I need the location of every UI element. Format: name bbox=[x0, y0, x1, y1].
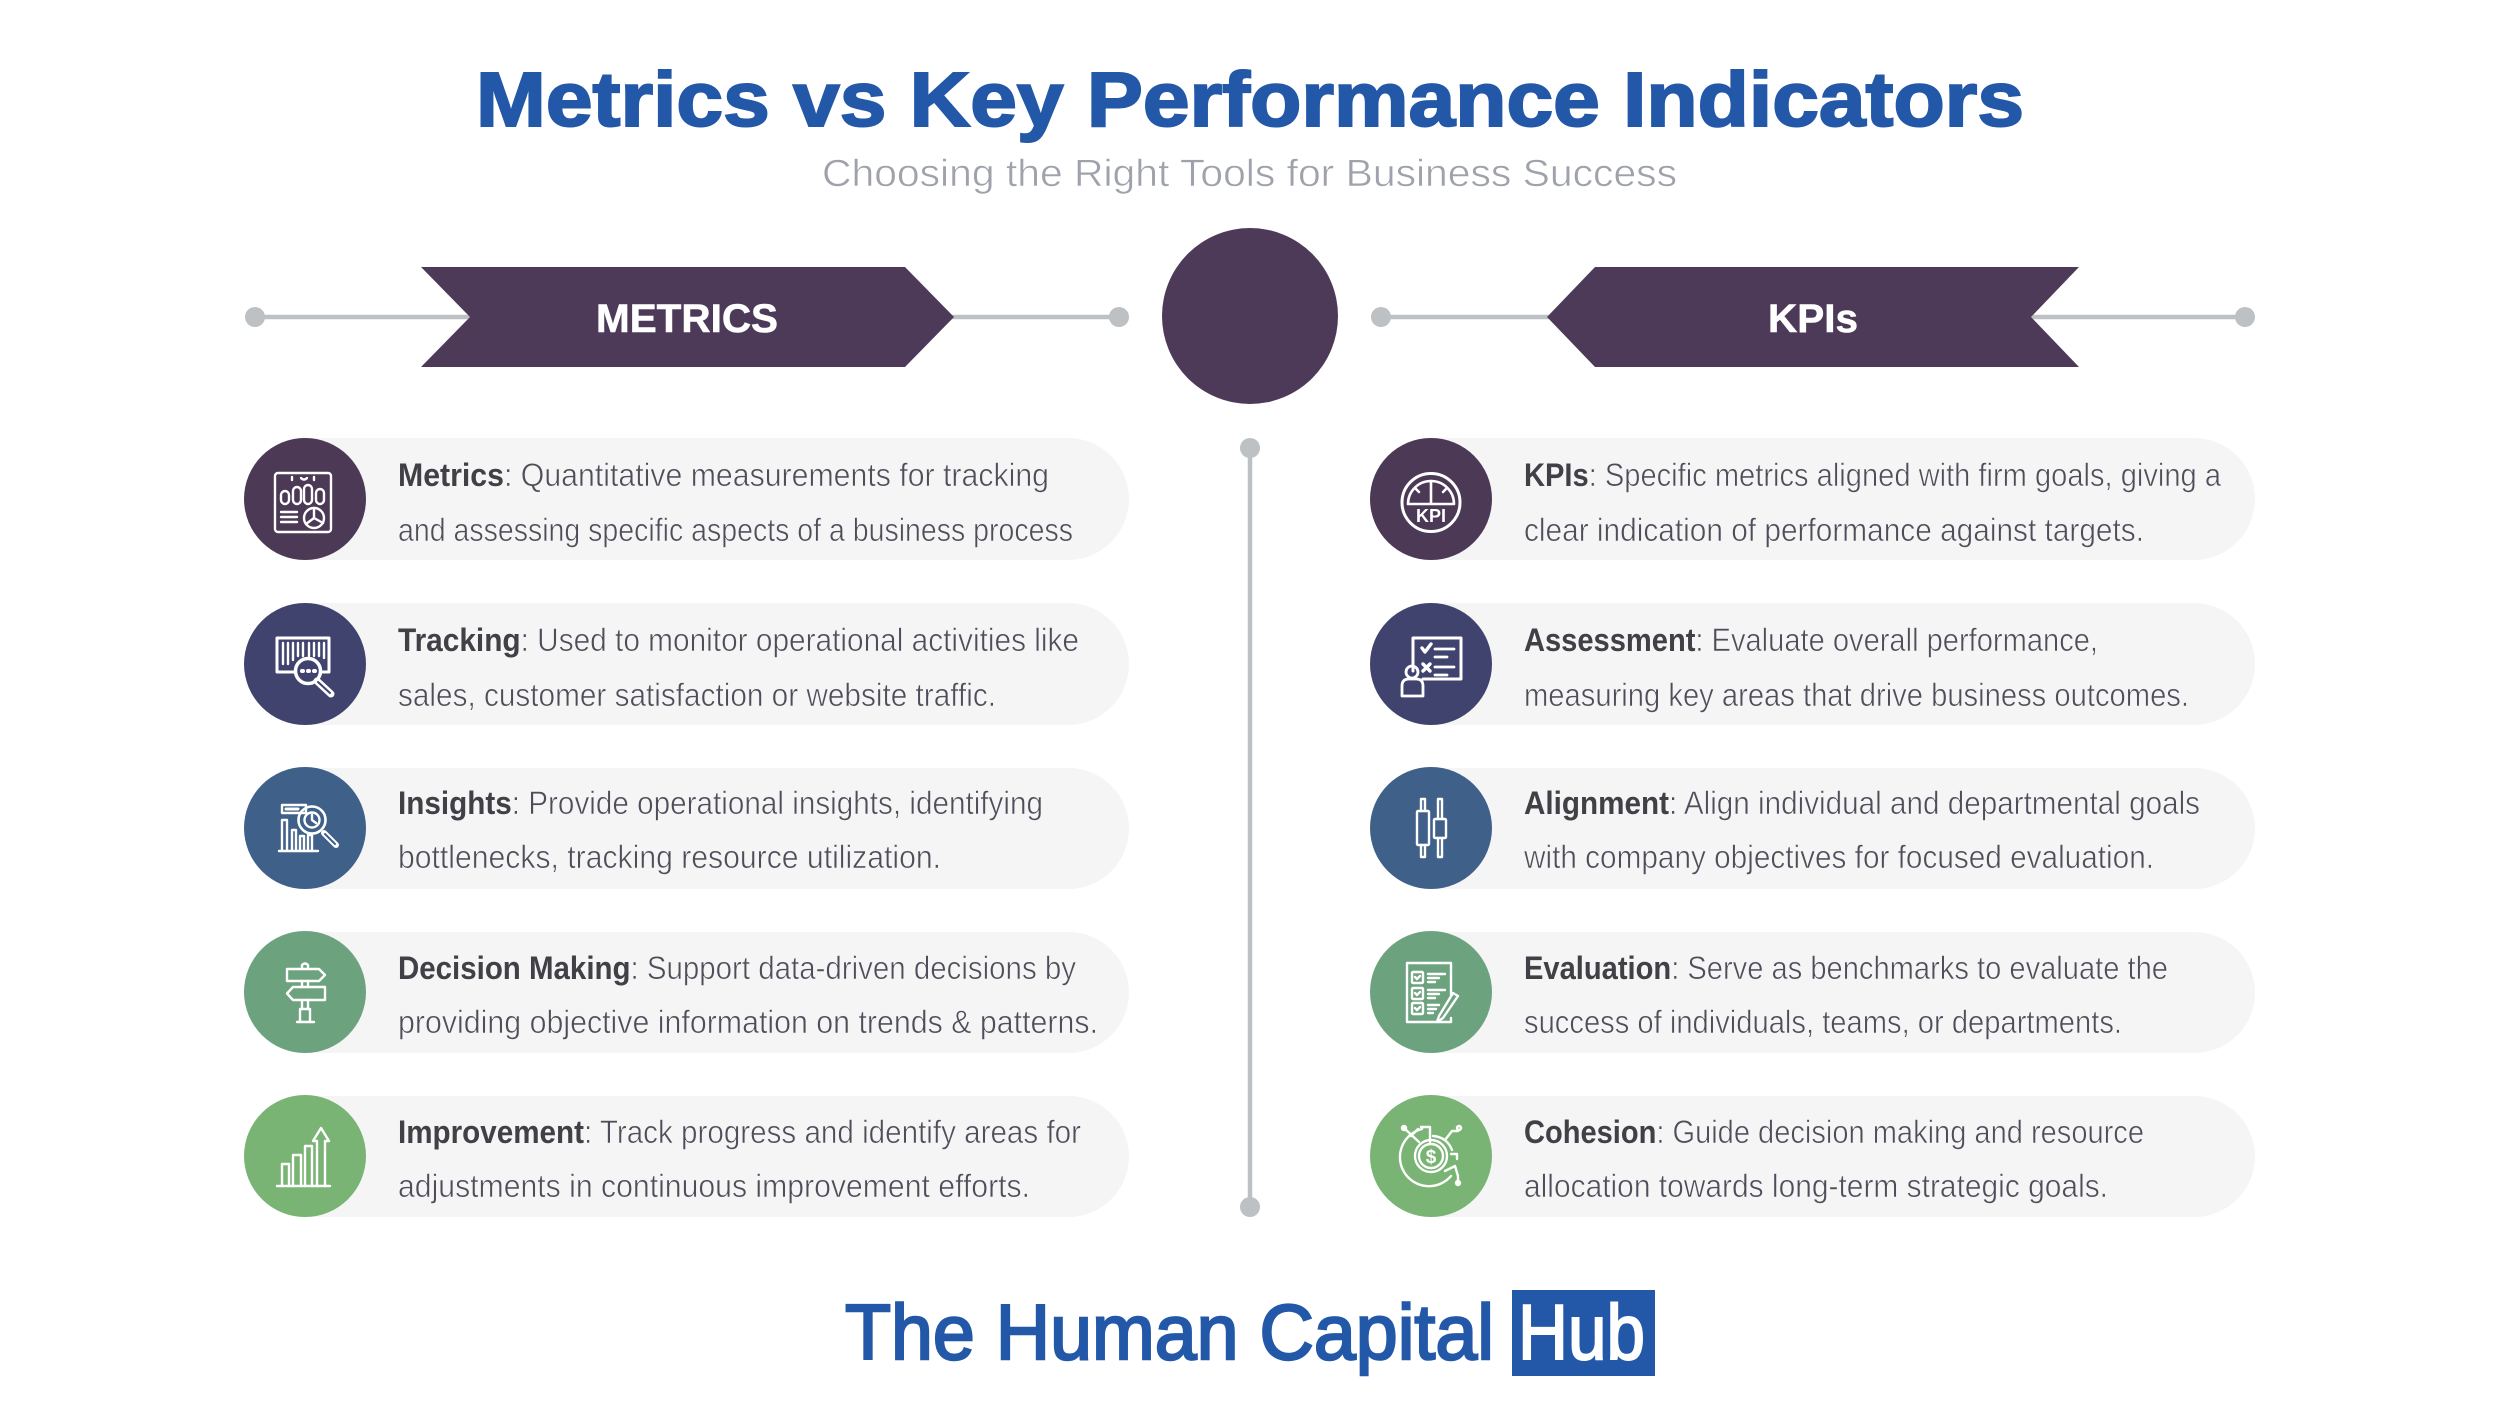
icon: assessment board bbox=[1402, 638, 1461, 696]
text: Assessment: Assessment: Evaluate overall performance, bbox=[1524, 622, 2098, 658]
row: Insights: bottlenecks, tracking resource utilization. bbox=[398, 839, 941, 875]
icon: growth bars bbox=[277, 1128, 330, 1186]
text: Evaluation: Evaluation: Serve as benchmarks to evaluate the bbox=[1524, 950, 2168, 986]
row: Improvement: adjustments in continuous improvement efforts. bbox=[398, 1168, 1030, 1204]
logo: The Human Capital Hub: Hub bbox=[1518, 1288, 1645, 1376]
row: Improvement bbox=[244, 1095, 1129, 1217]
text: Cohesion: Cohesion: Guide decision making and resource bbox=[1524, 1114, 2144, 1150]
icon: kpi gauge bbox=[1402, 474, 1460, 532]
icon: kpi gauge: KPI bbox=[1416, 506, 1446, 526]
icon: candlesticks bbox=[1417, 799, 1446, 857]
row: Metrics: and assessing specific aspects of a business process bbox=[398, 512, 1073, 548]
icon: chart magnifier bbox=[279, 805, 336, 851]
row: Decision Making bbox=[244, 931, 1129, 1053]
row: Alignment bbox=[1370, 767, 2255, 889]
panel: kpis column bbox=[1370, 438, 2255, 1217]
row: Insights bbox=[244, 767, 1129, 889]
icon: barcode magnifier bbox=[277, 638, 331, 694]
center circle bbox=[1162, 228, 1338, 404]
icon: dashboard bbox=[275, 473, 331, 532]
row: Cohesion: allocation towards long-term strategic goals. bbox=[1524, 1168, 2108, 1204]
subtitle: Choosing the Right Tools for Business Success bbox=[822, 153, 1677, 195]
center divider line bbox=[1240, 438, 1260, 1217]
row: Decision Making: providing objective information on trends & patterns. bbox=[398, 1004, 1098, 1040]
panel: metrics column bbox=[244, 438, 1129, 1217]
icon: checklist bbox=[1407, 963, 1458, 1022]
icon: money target bbox=[1400, 1126, 1461, 1186]
row: Assessment bbox=[1370, 603, 2255, 725]
text: Decision Making: Decision Making: Support data-driven decisions by bbox=[398, 950, 1076, 986]
row: KPIs: clear indication of performance against targets. bbox=[1524, 512, 2144, 548]
title: Metrics vs Key Performance Indicators bbox=[476, 57, 2024, 143]
row: Assessment: measuring key areas that drive business outcomes. bbox=[1524, 677, 2189, 713]
text: Insights: Insights: Provide operational insights, identifying bbox=[398, 785, 1043, 821]
logo: The Human Capital Hub: The Human Capital bbox=[845, 1288, 1494, 1376]
text: Improvement: Improvement: Track progress and identify areas for bbox=[398, 1114, 1081, 1150]
row: Metrics bbox=[244, 438, 1129, 560]
row: Alignment: with company objectives for focused evaluation. bbox=[1523, 839, 2154, 875]
metrics header banner: METRICS bbox=[596, 297, 778, 341]
row: Cohesion bbox=[1370, 1095, 2255, 1217]
metrics header banner bbox=[245, 267, 1129, 367]
row: Tracking: sales, customer satisfaction or website traffic. bbox=[398, 677, 996, 713]
text: Metrics: Metrics: Quantitative measurements for tracking bbox=[398, 457, 1049, 493]
kpis header banner bbox=[1371, 267, 2255, 367]
text: Alignment: Alignment: Align individual and departmental goals bbox=[1524, 785, 2200, 821]
kpis header banner: KPIs bbox=[1768, 297, 1858, 341]
row: KPIs bbox=[1370, 438, 2255, 560]
row: Evaluation bbox=[1370, 931, 2255, 1053]
row: Tracking bbox=[244, 603, 1129, 725]
text: Tracking: Tracking: Used to monitor operational activities like bbox=[398, 622, 1079, 658]
text: KPIs: KPIs: Specific metrics aligned with firm goals, giving a bbox=[1524, 457, 2221, 493]
row: Evaluation: success of individuals, teams, or departments. bbox=[1524, 1004, 2122, 1040]
icon: signpost bbox=[287, 964, 325, 1022]
icon: money target: $ bbox=[1426, 1147, 1437, 1168]
